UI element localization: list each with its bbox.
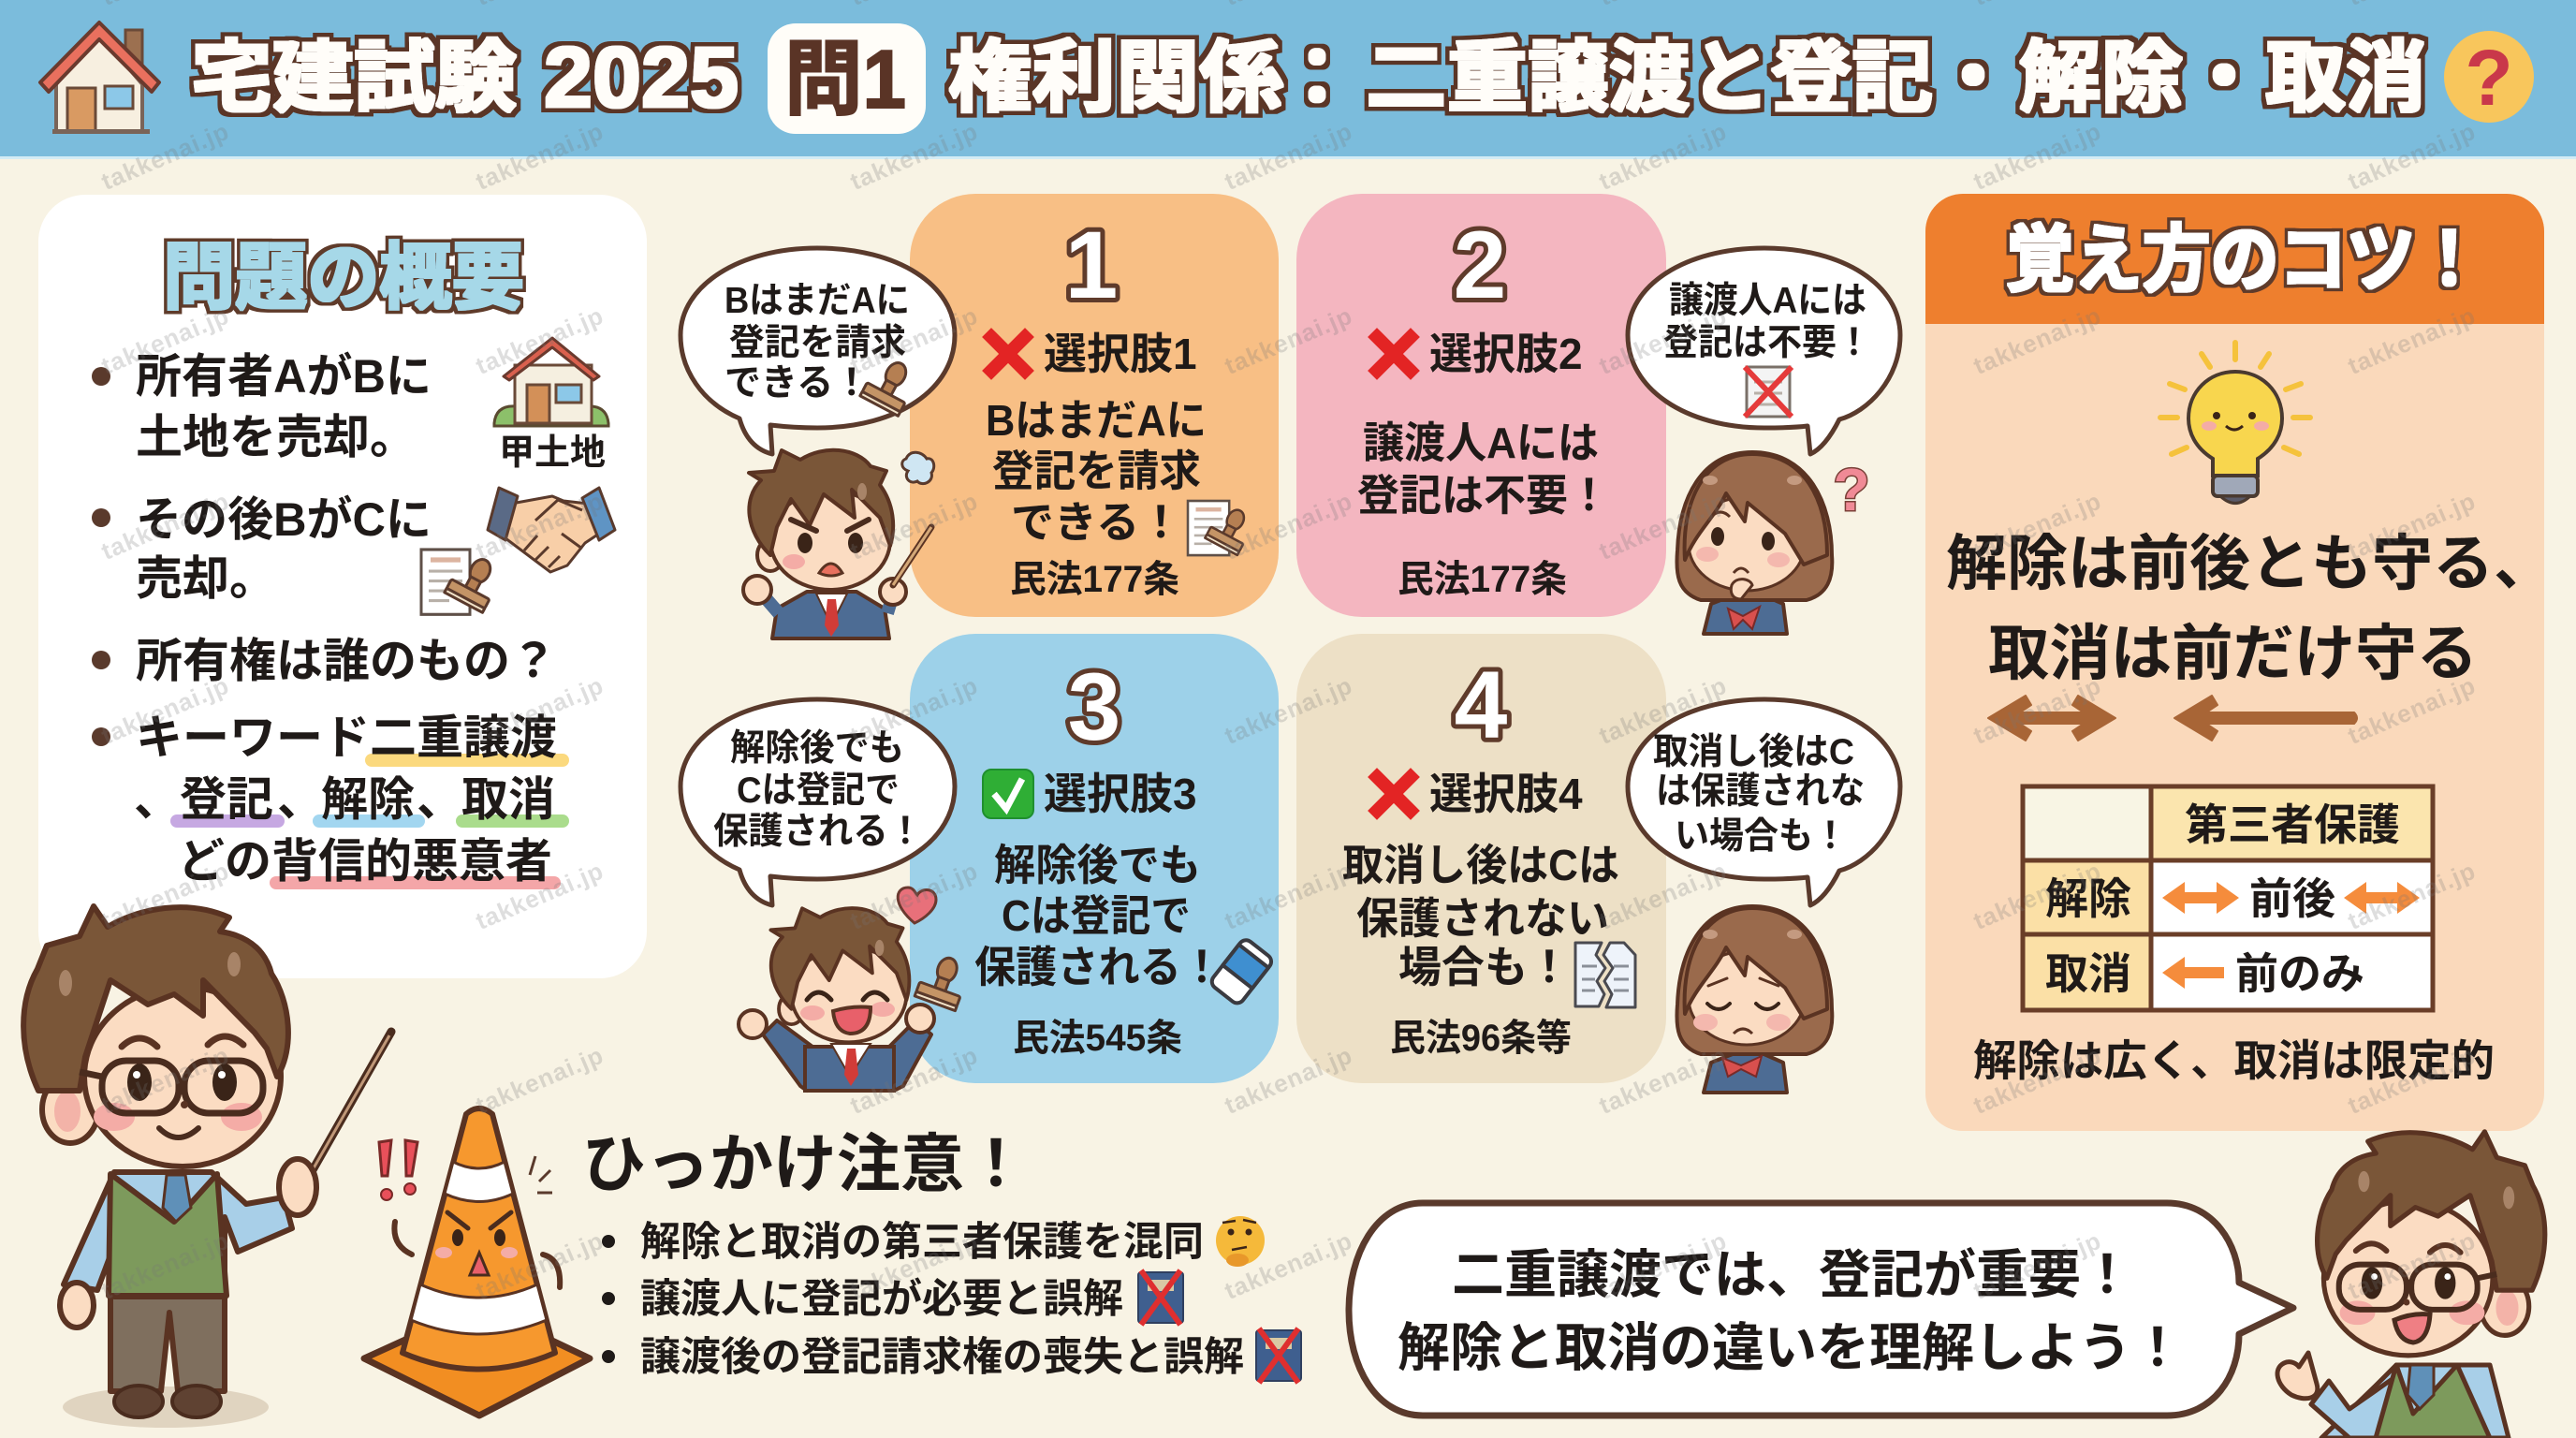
watermark: takkenai.jp [1221,671,1356,750]
badge: question number [768,23,926,134]
watermark: takkenai.jp [472,301,607,380]
heading: trap warning: ひっかけ注意！ [582,1129,1028,1200]
title: part 5: 取消 [2265,34,2426,122]
watermark: takkenai.jp [846,671,982,750]
header banner [0,0,2576,159]
bullet: sale to C [92,493,432,605]
table: third party protection: 第三者保護 [2185,800,2400,849]
watermark: takkenai.jp [1595,671,1731,750]
watermark: takkenai.jp [2344,1041,2480,1120]
watermark: takkenai.jp [1969,1041,2105,1120]
option text [1342,841,1619,991]
heading: overview: 問題の概要 [163,236,524,318]
option text: 譲渡人Aには [1363,418,1599,467]
watermark: takkenai.jp [1221,1041,1356,1120]
arrow: before only [2174,696,2357,741]
card 1 [910,194,1279,617]
law citation: 民法545条 [1013,1018,1182,1059]
speech bubble 3 [681,699,955,905]
character: teacher with pointer [23,906,391,1428]
watermark: takkenai.jp [846,1041,982,1120]
arrow: left single [2162,957,2224,989]
option text: BはまだAに [986,396,1207,445]
icon: crossed book [1138,1270,1183,1325]
icon: thinking face [1216,1216,1265,1267]
icon: stamp [860,354,920,416]
watermark: takkenai.jp [1969,1226,2105,1305]
icon: handshake [488,488,615,572]
watermark: takkenai.jp [1595,857,1731,935]
option text [974,841,1222,991]
speech bubble 1: BはまだAに [724,281,910,321]
bullet: keywords: 、 [277,773,324,826]
icon: land house [494,338,608,426]
bullet: ownership question: 所有権は誰のもの？ [136,635,557,687]
title: part 4: 解除 [2019,34,2183,122]
speech bubble 1 [681,248,955,454]
bullet: keywords: 登記 [180,773,273,826]
panel: problem overview [38,195,647,978]
speech bubble 1: できる！ [724,363,870,404]
arrow: left double [2162,882,2239,914]
heading: tips: 覚え方のコツ！ [2006,218,2483,301]
watermark: takkenai.jp [472,671,607,750]
speech bubble 1: 登記を請求 [729,323,906,363]
watermark: takkenai.jp [2344,1226,2480,1305]
option text [986,396,1207,547]
number 1: 1 [1065,212,1118,318]
watermark: takkenai.jp [2344,671,2480,750]
icon: question mark [2444,31,2534,123]
watermark: takkenai.jp [846,301,982,380]
watermark: takkenai.jp [1595,301,1731,380]
option text: 保護されない [1356,894,1609,943]
watermark: takkenai.jp [1595,117,1731,196]
icon: light bulb [2160,343,2310,504]
watermark: takkenai.jp [1221,857,1356,935]
law citation: 民法96条等 [1390,1018,1572,1059]
watermark: takkenai.jp [472,487,607,565]
watermark: takkenai.jp [97,1226,233,1305]
icon: check [983,770,1033,818]
speech bubble 4: は保護されな [1656,771,1865,812]
icon: cross [1377,777,1411,811]
bullet: keywords: 、 [134,773,181,826]
icon: crossed book [1256,1328,1301,1383]
watermark: takkenai.jp [2344,857,2480,935]
speech bubble: conclusion: 二重譲渡では、登記が重要！ [1452,1245,2133,1304]
card 3 [910,634,1279,1083]
watermark: takkenai.jp [1969,117,2105,196]
speech bubble 2: 登記は不要！ [1663,323,1871,363]
speech bubble 4: 取消し後はC [1653,732,1854,772]
title: year: 2025 [544,30,739,125]
watermark: takkenai.jp [1595,1226,1731,1305]
option label: 選択肢4 [1429,770,1583,818]
character: teacher speaking [2277,1132,2545,1438]
icon: question mark: ? [2465,34,2513,122]
watermark: takkenai.jp [2344,117,2480,196]
bullet: sale to C: その後BがCに [136,493,432,546]
panel header [1925,194,2544,324]
watermark: takkenai.jp [97,487,233,565]
speech bubble: conclusion [1349,1203,2293,1416]
bullet: keywords [92,712,569,889]
watermark: takkenai.jp [846,117,982,196]
arrow: right double [2344,882,2420,914]
watermark: takkenai.jp [2344,301,2480,380]
option text: 登記を請求 [992,447,1201,495]
watermark: takkenai.jp [472,1226,607,1305]
icon: crossed document [1745,367,1792,417]
character: happy boy [739,888,977,1091]
bullet: keywords: キーワード二重譲渡 [136,712,557,764]
speech bubble 3: Cは登記で [737,770,900,811]
table: third party protection [2023,786,2433,1010]
option text: Cは登記で [1002,891,1191,940]
watermark: takkenai.jp [97,857,233,935]
panel: memory tips [1925,194,2554,1131]
watermark: takkenai.jp [1221,1226,1356,1305]
table: third party protection: 前のみ [2235,949,2364,998]
speech bubble: conclusion: 解除と取消の違いを理解しよう！ [1398,1318,2184,1377]
trap item 1: 解除と取消の第三者保護を混同 [640,1220,1204,1265]
option text: 保護される！ [974,943,1222,991]
law citation: 民法177条 [1398,559,1567,600]
bullet: keywords: 解除 [321,773,415,826]
number 4: 4 [1455,652,1508,758]
bullet: sale to B: 所有者AがBに [136,350,432,403]
speech bubble 3: 解除後でも [730,728,904,769]
speech bubble 2 [1628,248,1900,454]
icon: exclamation marks [379,1140,417,1176]
speech bubble 4: い場合も！ [1675,816,1848,857]
icon: traffic cone [364,1108,590,1416]
icon: document and stamp [421,550,505,614]
label: land: 甲土地 [499,433,606,473]
speech bubble 2: 譲渡人Aには [1669,281,1866,321]
watermark: takkenai.jp [1969,301,2105,380]
bullet: keywords: 、 [417,773,463,826]
watermark: takkenai.jp [1221,117,1356,196]
tip text [1946,529,2554,687]
watermark: takkenai.jp [97,117,233,196]
character: thinking girl [1676,452,1870,634]
option text: 登記は不要！ [1357,471,1610,520]
title: part 2: 権利関係 [948,34,1283,122]
character: sad girl [1676,906,1832,1093]
option label: 選択肢3 [1044,770,1197,818]
tip text: 解除は前後とも守る、 [1946,529,2554,597]
option text: できる！ [1011,498,1182,547]
bullet: sale to B: 土地を売却。 [136,411,417,463]
law citation: 民法177条 [1010,559,1179,600]
bullet: sale to C: 売却。 [136,552,276,605]
watermark: takkenai.jp [846,1226,982,1305]
title: part 1: 宅建試験 [191,34,517,122]
option text: 取消し後はCは [1342,841,1619,889]
card 4 [1296,634,1666,1083]
section: trap warning [582,1129,1301,1383]
watermark: takkenai.jp [1595,1041,1731,1120]
tip text: 取消は前だけ守る [1988,619,2478,687]
speech bubble 3: 保護される！ [713,812,923,852]
option label: 選択肢1 [1044,330,1197,378]
trap item 3: 譲渡後の登記請求権の喪失と誤解 [640,1335,1244,1380]
bullet: keywords: 取消 [461,773,555,826]
watermark: takkenai.jp [1221,487,1356,565]
title: colon: ： [1278,34,1356,122]
watermark: takkenai.jp [1969,671,2105,750]
icon: heart [898,888,936,923]
icon: torn document [1575,943,1635,1007]
table: third party protection: 前後 [2249,874,2335,923]
icon: puff [902,452,934,484]
option text: 場合も！ [1398,943,1571,991]
icon: document and stamp [1188,501,1256,555]
table: third party protection: 取消 [2045,949,2131,998]
watermark: takkenai.jp [1969,857,2105,935]
watermark: takkenai.jp [846,487,982,565]
badge: question number: 問1 [784,33,906,125]
title: part 3: 二重譲渡と登記 [1366,34,1933,122]
number 2: 2 [1454,212,1506,318]
option label: 選択肢2 [1429,330,1583,378]
bullet: keywords: どの背信的悪意者 [178,835,552,888]
number 3: 3 [1068,653,1120,760]
watermark: takkenai.jp [1969,487,2105,565]
watermark: takkenai.jp [846,857,982,935]
watermark: takkenai.jp [1221,301,1356,380]
icon: house [40,22,159,134]
tip summary: 解除は広く、取消は限定的 [1973,1036,2495,1085]
icon: cross [991,337,1025,371]
title: dot: ・ [2185,34,2263,122]
arrow: both directions [1988,696,2115,741]
card 2 [1296,194,1666,617]
watermark: takkenai.jp [472,857,607,935]
watermark: takkenai.jp [2344,487,2480,565]
icon: eraser [1209,937,1274,1006]
icon: cross [1377,337,1411,371]
character: angry boy [743,450,934,638]
speech bubble 4 [1628,699,1900,905]
icon: question mark: ? [1833,456,1870,523]
watermark: takkenai.jp [472,1041,607,1120]
watermark: takkenai.jp [97,671,233,750]
option text: 解除後でも [994,841,1201,889]
watermark: takkenai.jp [1595,487,1731,565]
watermark: takkenai.jp [97,1041,233,1120]
option text [1357,418,1610,520]
trap item 2: 譲渡人に登記が必要と誤解 [640,1277,1123,1322]
table: third party protection: 解除 [2045,874,2131,923]
bullet: sale to B [92,350,432,463]
title: dot: ・ [1934,34,2012,122]
watermark: takkenai.jp [97,301,233,380]
watermark: takkenai.jp [472,117,607,196]
icon: stamp [909,946,977,1016]
